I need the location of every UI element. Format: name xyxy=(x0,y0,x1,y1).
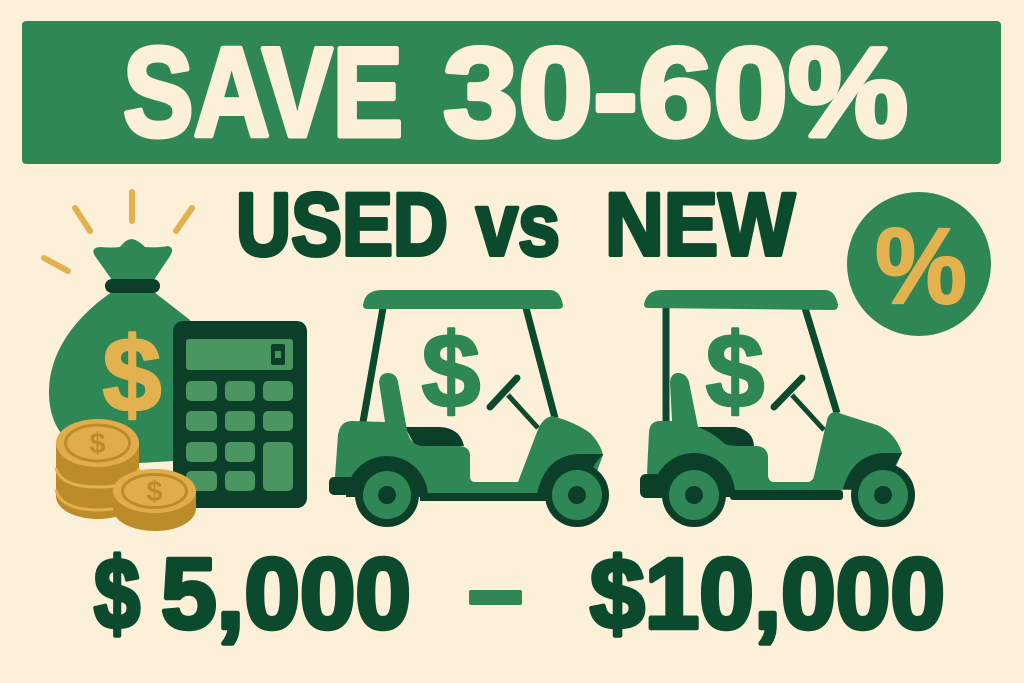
icon: coin stack xyxy=(56,419,139,519)
icon: single coin xyxy=(113,469,196,531)
heading: used vs new: USED xyxy=(236,174,448,274)
icon: money bag: $ xyxy=(103,316,161,434)
icon: used golf cart xyxy=(329,290,609,527)
heading: used vs new: vs xyxy=(476,174,560,274)
icon: calculator xyxy=(173,321,307,508)
icon: single coin: $ xyxy=(146,476,163,508)
heading: used vs new: NEW xyxy=(605,174,795,274)
title banner xyxy=(22,21,1001,164)
icon: new golf cart xyxy=(640,290,915,527)
icon: money bag xyxy=(49,239,190,463)
title banner: SAVE xyxy=(123,21,403,163)
price: new: $10,000 xyxy=(590,538,945,650)
icon: sparkle rays xyxy=(44,192,192,271)
icon: percent badge: % xyxy=(875,205,967,326)
price: used: $ xyxy=(94,538,140,650)
icon: new golf cart: $ xyxy=(706,312,764,430)
icon: coin stack: $ xyxy=(89,428,106,460)
icon: percent badge xyxy=(847,192,991,336)
heading: used vs new xyxy=(236,174,795,274)
title banner: 30-60% xyxy=(443,21,908,163)
dash xyxy=(469,590,522,605)
price: used: 5,000 xyxy=(161,538,411,650)
icon: used golf cart: $ xyxy=(422,312,480,430)
